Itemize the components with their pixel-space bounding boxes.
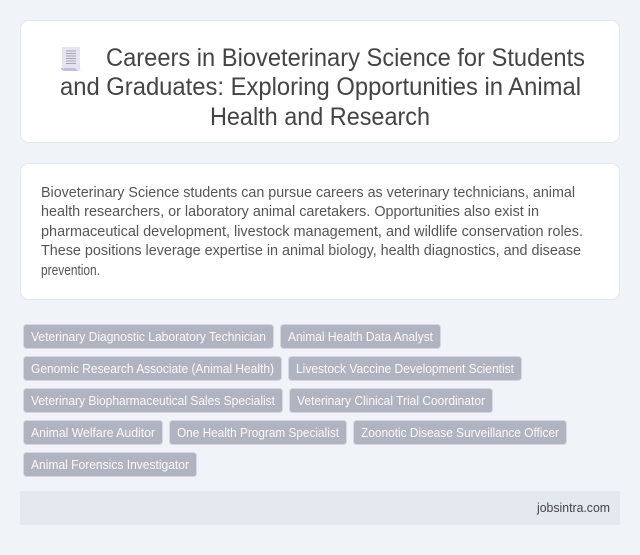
tag [24,324,274,348]
tag: Veterinary Biopharmaceutical Sales Specialist [31,393,275,408]
tag: Animal Forensics Investigator [31,457,190,472]
panel: title [20,20,620,142]
tag: Livestock Vaccine Development Scientist [296,361,514,376]
tag group: careers [24,324,566,476]
tag: Genomic Research Associate (Animal Health) [31,361,274,376]
description text: prevention. [41,263,100,279]
title text: and Graduates: Exploring Opportunities in Animal [60,74,581,101]
title text: Careers in Bioveterinary Science for Students [106,45,585,72]
tag: Animal Welfare Auditor [31,425,156,440]
tag [24,388,282,412]
tag: One Health Program Specialist [177,425,339,440]
tag [280,324,440,348]
footer bar: jobsintra.com [536,500,610,515]
icon: scroll document [61,47,81,71]
tag [354,420,566,444]
tag: Animal Health Data Analyst [288,329,433,344]
description text: pharmaceutical development, livestock management, and wildlife conservation roles. [41,224,583,240]
description text [41,185,583,279]
title text: Health and Research [210,104,430,131]
description text: Bioveterinary Science students can pursue careers as veterinary technicians, animal [41,185,575,201]
tag [24,356,282,380]
tag [290,388,492,412]
tag: Veterinary Diagnostic Laboratory Technician [31,329,266,344]
description text: health researchers, or laboratory animal caretakers. Opportunities also exist in [41,204,539,220]
tag [288,356,522,380]
footer bar [20,491,620,525]
tag: Veterinary Clinical Trial Coordinator [297,393,486,408]
tag: Zoonotic Disease Surveillance Officer [361,425,560,440]
tag [24,452,196,476]
tag [24,420,162,444]
description text: These positions leverage expertise in animal biology, health diagnostics, and disease [41,243,581,259]
tag [170,420,346,444]
panel: description [20,164,620,300]
title text [60,45,585,131]
